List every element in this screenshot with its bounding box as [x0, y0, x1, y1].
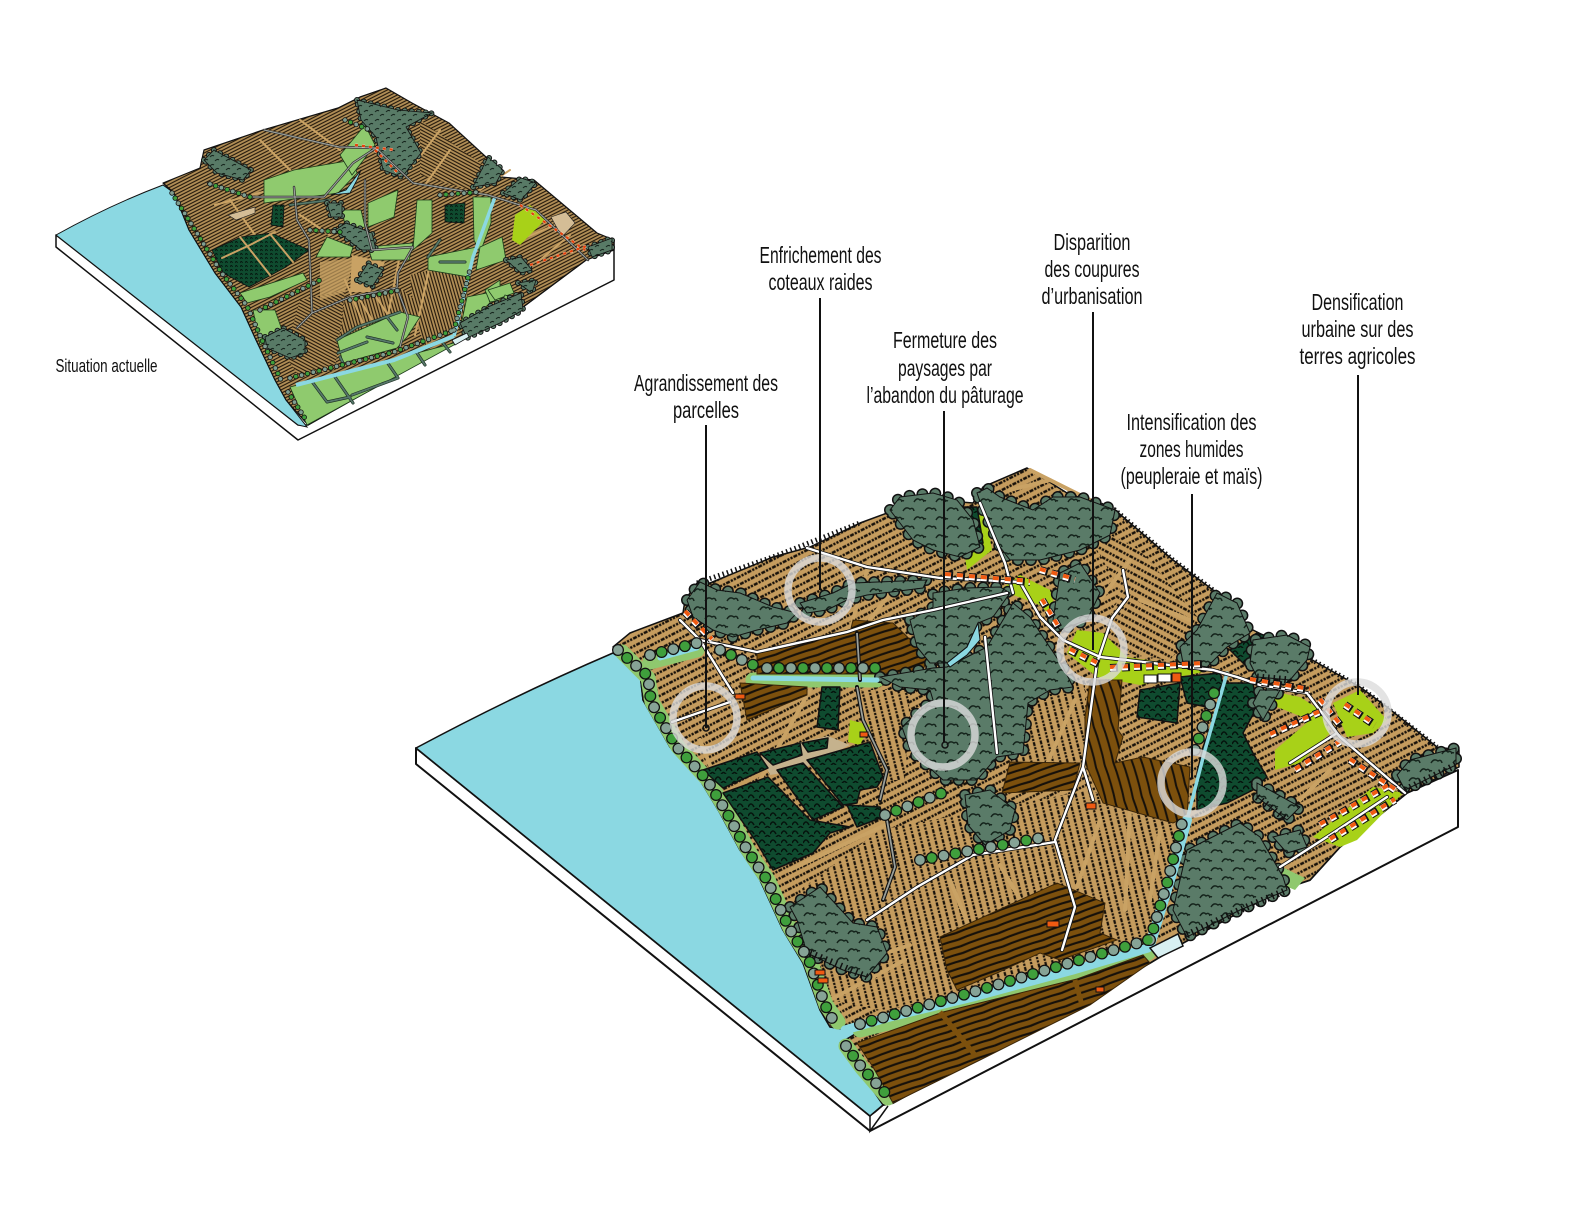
lake and stream small — [296, 170, 495, 385]
vine lanes — [660, 470, 1330, 1000]
brown ploughed fields — [740, 620, 1190, 1103]
label: intensification des zones humides: zones humides — [1140, 436, 1244, 462]
map: situation actuelle — [56, 88, 614, 440]
corner edge — [870, 1106, 888, 1131]
houses — [685, 569, 1395, 840]
label: disparition des coupures d'urbanisation: des coupures — [1044, 256, 1140, 282]
forests small — [204, 100, 612, 358]
pond small — [452, 333, 469, 345]
sea — [416, 653, 883, 1116]
label: agrandissement des parcelles — [634, 370, 778, 423]
roads small — [208, 130, 588, 347]
dark plantation lanes small — [222, 232, 293, 275]
caption: situation actuelle: Situation actuelle — [56, 356, 158, 376]
pond and weir — [1150, 934, 1183, 958]
label: enfrichement des coteaux raides — [760, 242, 882, 295]
label: disparition des coupures d'urbanisation: d’urbanisation — [1042, 283, 1142, 309]
sea small — [56, 185, 307, 427]
label: agrandissement des parcelles: parcelles — [673, 397, 739, 423]
label: agrandissement des parcelles: Agrandissement des — [634, 370, 778, 396]
streams — [660, 648, 1227, 1030]
tree rows small — [172, 120, 480, 420]
label: fermeture des paysages: paysages par — [898, 355, 992, 381]
plantation ground — [760, 736, 850, 775]
label: intensification des zones humides: Intensification des — [1126, 409, 1256, 435]
label: densification urbaine — [1300, 289, 1416, 369]
vine parcels — [800, 520, 1390, 1010]
label: intensification des zones humides: (peupleraie et maïs) — [1120, 463, 1262, 489]
label: fermeture des paysages: Fermeture des — [893, 327, 997, 353]
green coast strip — [622, 650, 1148, 1098]
roads — [672, 503, 1405, 950]
map: scenario — [416, 468, 1459, 1131]
houses small — [355, 145, 590, 265]
vine parcels small — [215, 120, 570, 378]
terrain base — [613, 468, 1459, 1103]
lime village patches small — [512, 205, 545, 245]
label: intensification des zones humides — [1120, 409, 1262, 489]
beige plots small — [228, 207, 575, 237]
lake — [947, 623, 980, 667]
pastures small — [240, 125, 520, 425]
dark plantations small — [212, 203, 465, 287]
label: densification urbaine: Densification — [1312, 289, 1404, 315]
label: enfrichement des coteaux raides: coteaux raides — [768, 269, 872, 295]
lime patches — [848, 512, 1403, 890]
block side small — [56, 235, 614, 440]
label: densification urbaine: terres agricoles — [1300, 343, 1416, 369]
highlight rings — [673, 558, 1388, 814]
label: disparition des coupures d'urbanisation: Disparition — [1054, 229, 1130, 255]
block side — [416, 748, 1458, 1131]
terrain small — [163, 88, 614, 425]
back edge hatching — [697, 493, 1437, 747]
label: fermeture des paysages — [866, 327, 1024, 408]
label: enfrichement des coteaux raides: Enfrichement des — [760, 242, 882, 268]
label: densification urbaine: urbaine sur des — [1302, 316, 1414, 342]
single buildings — [735, 673, 1181, 992]
tree rows — [618, 643, 1215, 1096]
forest trunks — [810, 677, 1456, 977]
label: fermeture des paysages: l’abandon du pâturage — [866, 382, 1024, 408]
label: disparition des coupures d'urbanisation — [1042, 229, 1142, 309]
leader lines — [703, 298, 1358, 778]
dark plantations — [703, 507, 1270, 870]
bottom field dividers — [940, 980, 1082, 1055]
hedges small — [290, 200, 465, 403]
forests — [687, 488, 1456, 977]
